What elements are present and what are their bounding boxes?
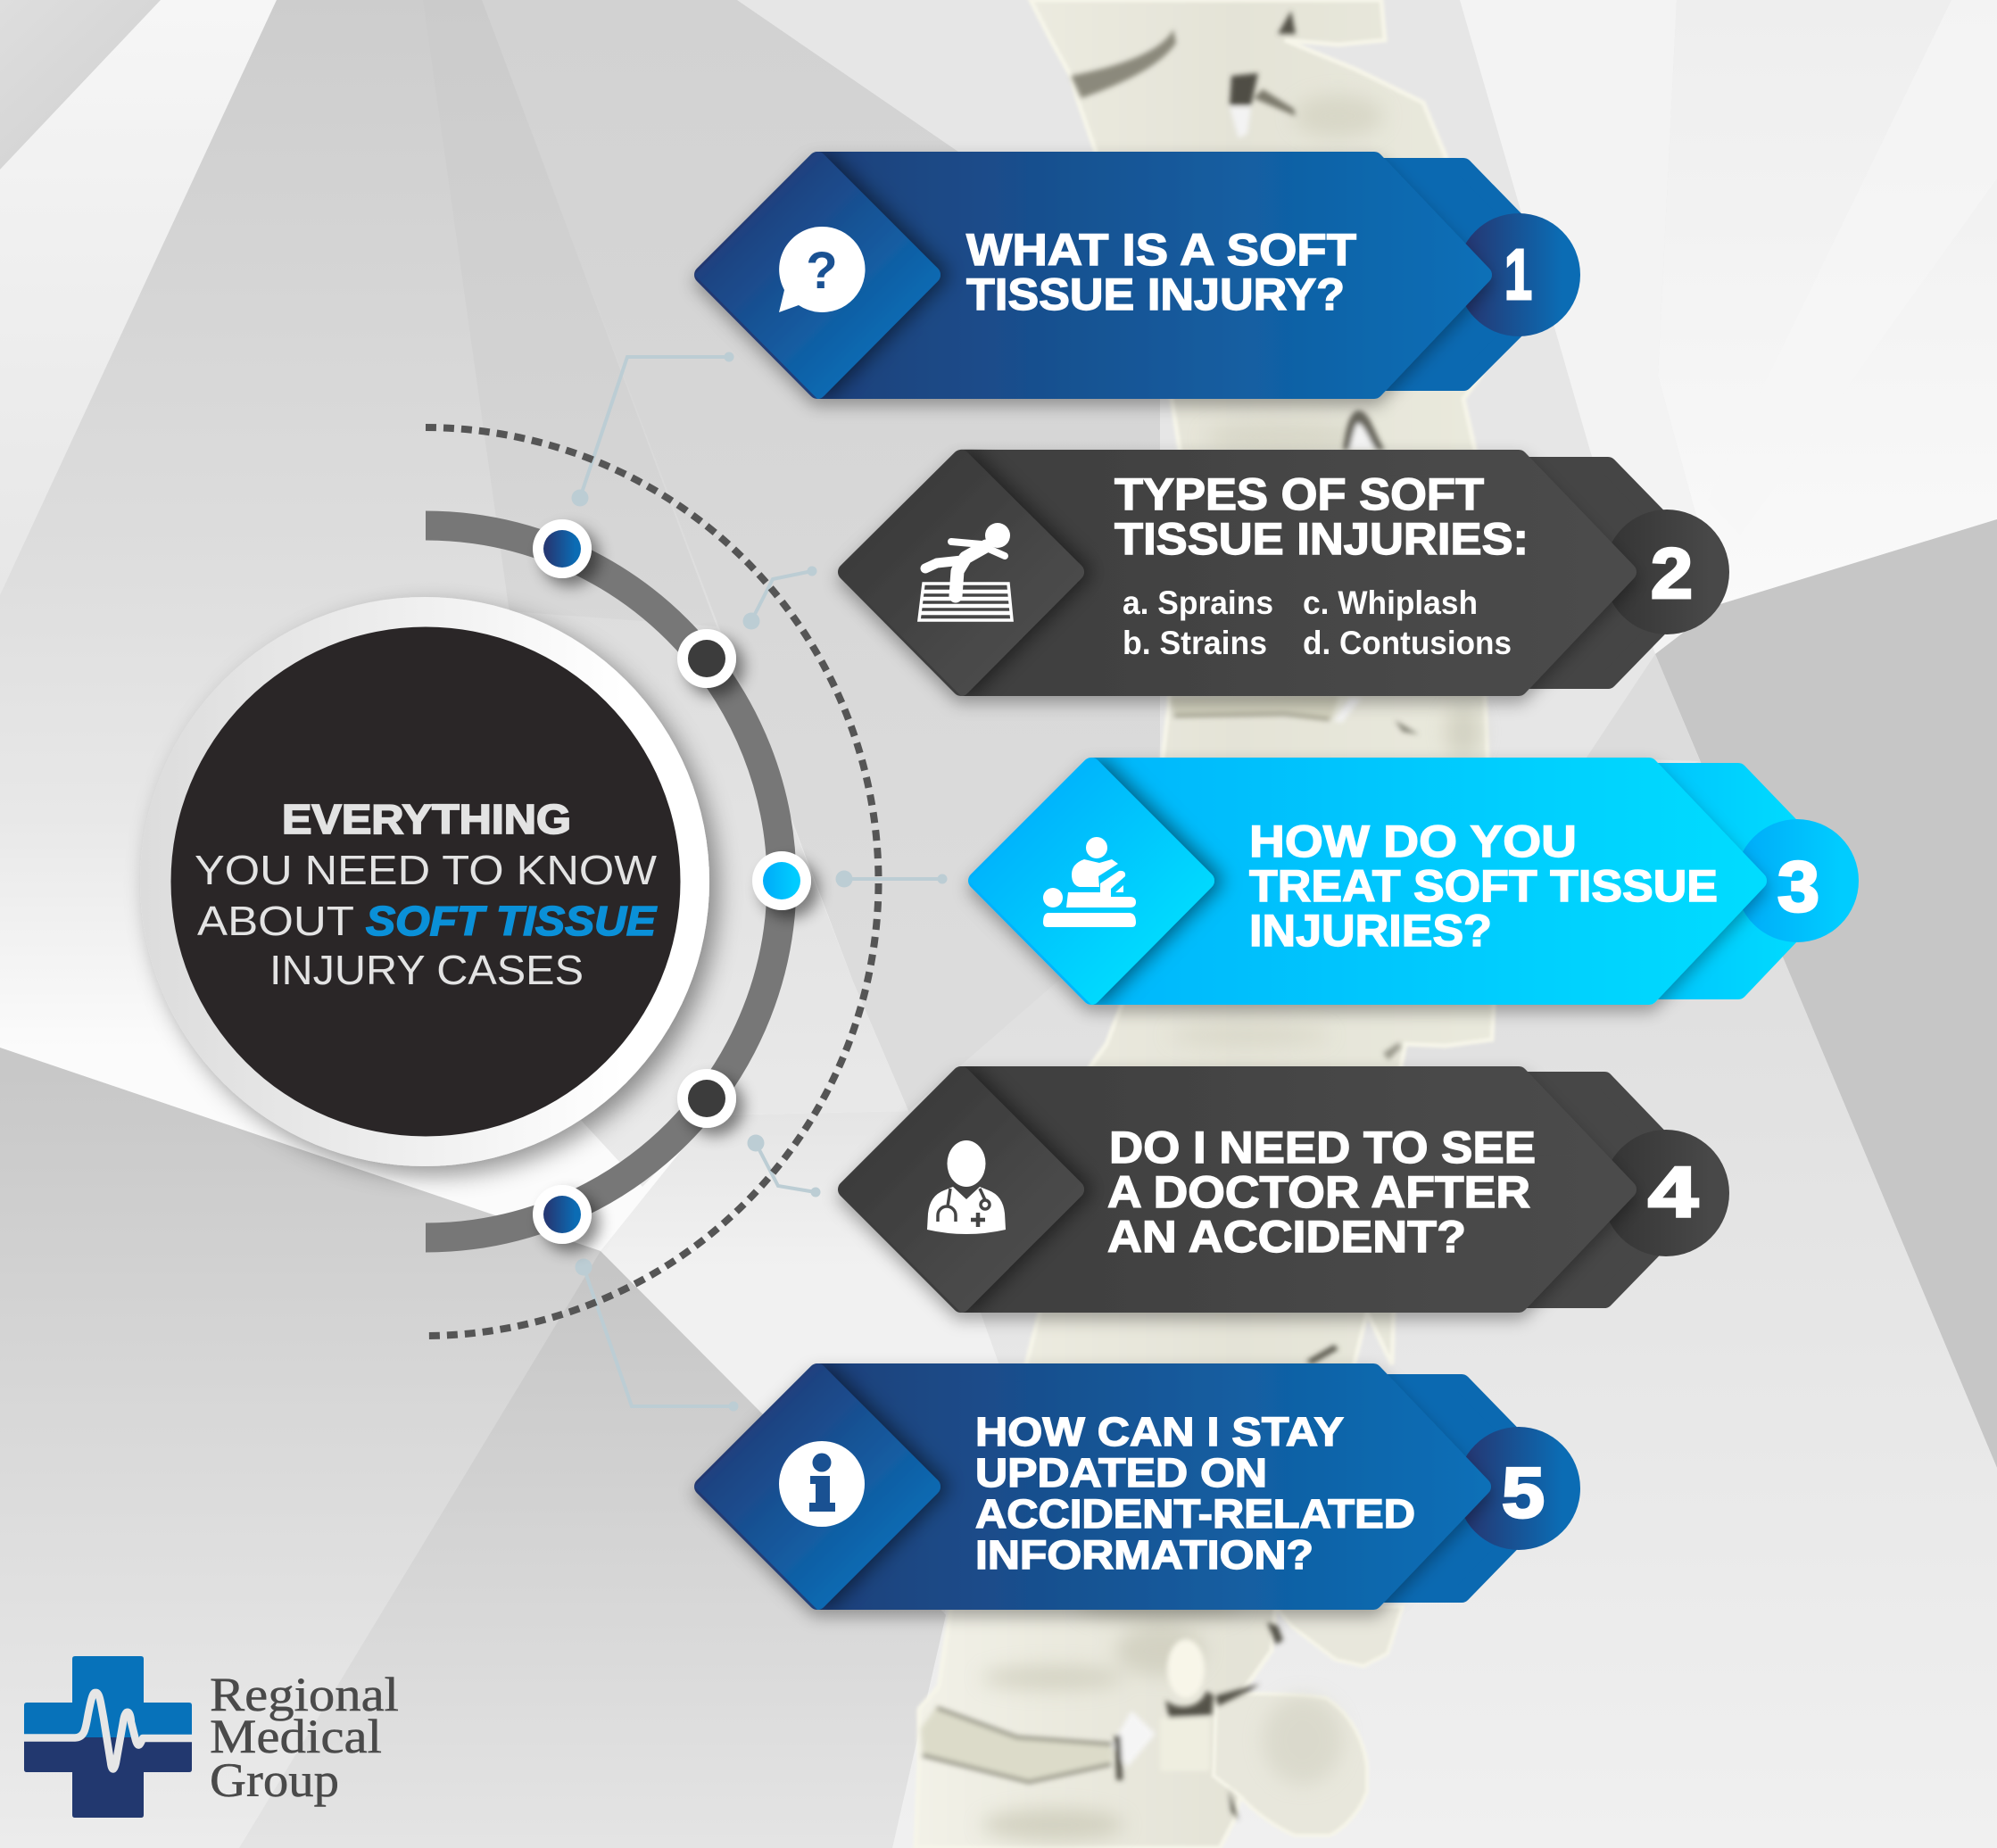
list: injury types: b. Strains [1123, 625, 1267, 661]
heading: question 2: TYPES OF SOFT [1115, 469, 1484, 519]
heading: question 5 [975, 1409, 1415, 1578]
icon: medical cross [24, 1656, 192, 1818]
heading: question 3: HOW DO YOU [1249, 816, 1577, 866]
logo wordmark: Group [210, 1753, 339, 1807]
heading: question 4: A DOCTOR AFTER [1107, 1167, 1530, 1217]
list: injury types: a. Sprains [1123, 584, 1273, 621]
icon: doctor [927, 1140, 1006, 1234]
heading: question 1: WHAT IS A SOFT [966, 225, 1356, 275]
badge title: SOFT TISSUE [366, 898, 657, 944]
badge title: EVERYTHING [282, 796, 571, 842]
heading: question 5: HOW CAN I STAY [975, 1409, 1344, 1454]
panel: question 2 [847, 459, 1729, 687]
badge title [195, 796, 658, 993]
heading: question 3 [1249, 816, 1718, 956]
list: injury types [1123, 584, 1512, 661]
logo wordmark [210, 1668, 399, 1807]
heading: question 1: TISSUE INJURY? [966, 269, 1345, 319]
heading: question 5: UPDATED ON [975, 1450, 1267, 1496]
icon: question bubble: ? [806, 242, 838, 300]
number 3: 3 [1777, 847, 1819, 926]
timeline nodes [533, 519, 811, 1244]
icon: falling person on mat [919, 523, 1012, 620]
icon: information [779, 1441, 865, 1527]
spine shading [982, 95, 1481, 1841]
heading: question 1 [966, 225, 1356, 319]
grey arc [426, 526, 782, 1238]
badge title: ABOUT [197, 898, 354, 944]
badge title: YOU NEED TO KNOW [195, 847, 658, 893]
heading: question 2 [1115, 469, 1529, 564]
panel: question 1 [703, 161, 1580, 390]
dashed orbit arc [423, 427, 879, 1336]
heading: question 4: DO I NEED TO SEE [1109, 1123, 1536, 1173]
connector lines [571, 352, 948, 1412]
logo: Regional Medical Group [24, 1656, 399, 1818]
heading: question 5: ACCIDENT-RELATED [975, 1491, 1415, 1537]
number 4: 4 [1648, 1152, 1699, 1231]
icon: question bubble [779, 227, 866, 312]
spine gaps and holes [921, 11, 1419, 1820]
heading: question 4: AN ACCIDENT? [1107, 1212, 1466, 1262]
icon: physical therapy [1043, 837, 1136, 927]
heading: question 3: INJURIES? [1249, 906, 1492, 956]
number 2: 2 [1651, 534, 1693, 613]
heading: question 2: TISSUE INJURIES: [1115, 514, 1529, 564]
badge title: INJURY CASES [269, 947, 584, 993]
heading: question 3: TREAT SOFT TISSUE [1249, 861, 1718, 911]
logo wordmark: Medical [210, 1710, 382, 1763]
number 5: 5 [1502, 1453, 1545, 1532]
panel: question 4 [847, 1075, 1729, 1304]
spine illustration [916, 0, 1494, 1848]
logo wordmark: Regional [210, 1668, 399, 1721]
panel: question 5 [703, 1372, 1580, 1601]
list: injury types: c. Whiplash [1303, 584, 1478, 621]
number 1: 1 [1504, 235, 1532, 314]
list: injury types: d. Contusions [1303, 625, 1512, 661]
panel: question 3 [977, 767, 1859, 996]
heading: question 4 [1107, 1123, 1536, 1262]
heading: question 5: INFORMATION? [975, 1532, 1313, 1578]
central badge [140, 597, 709, 1166]
